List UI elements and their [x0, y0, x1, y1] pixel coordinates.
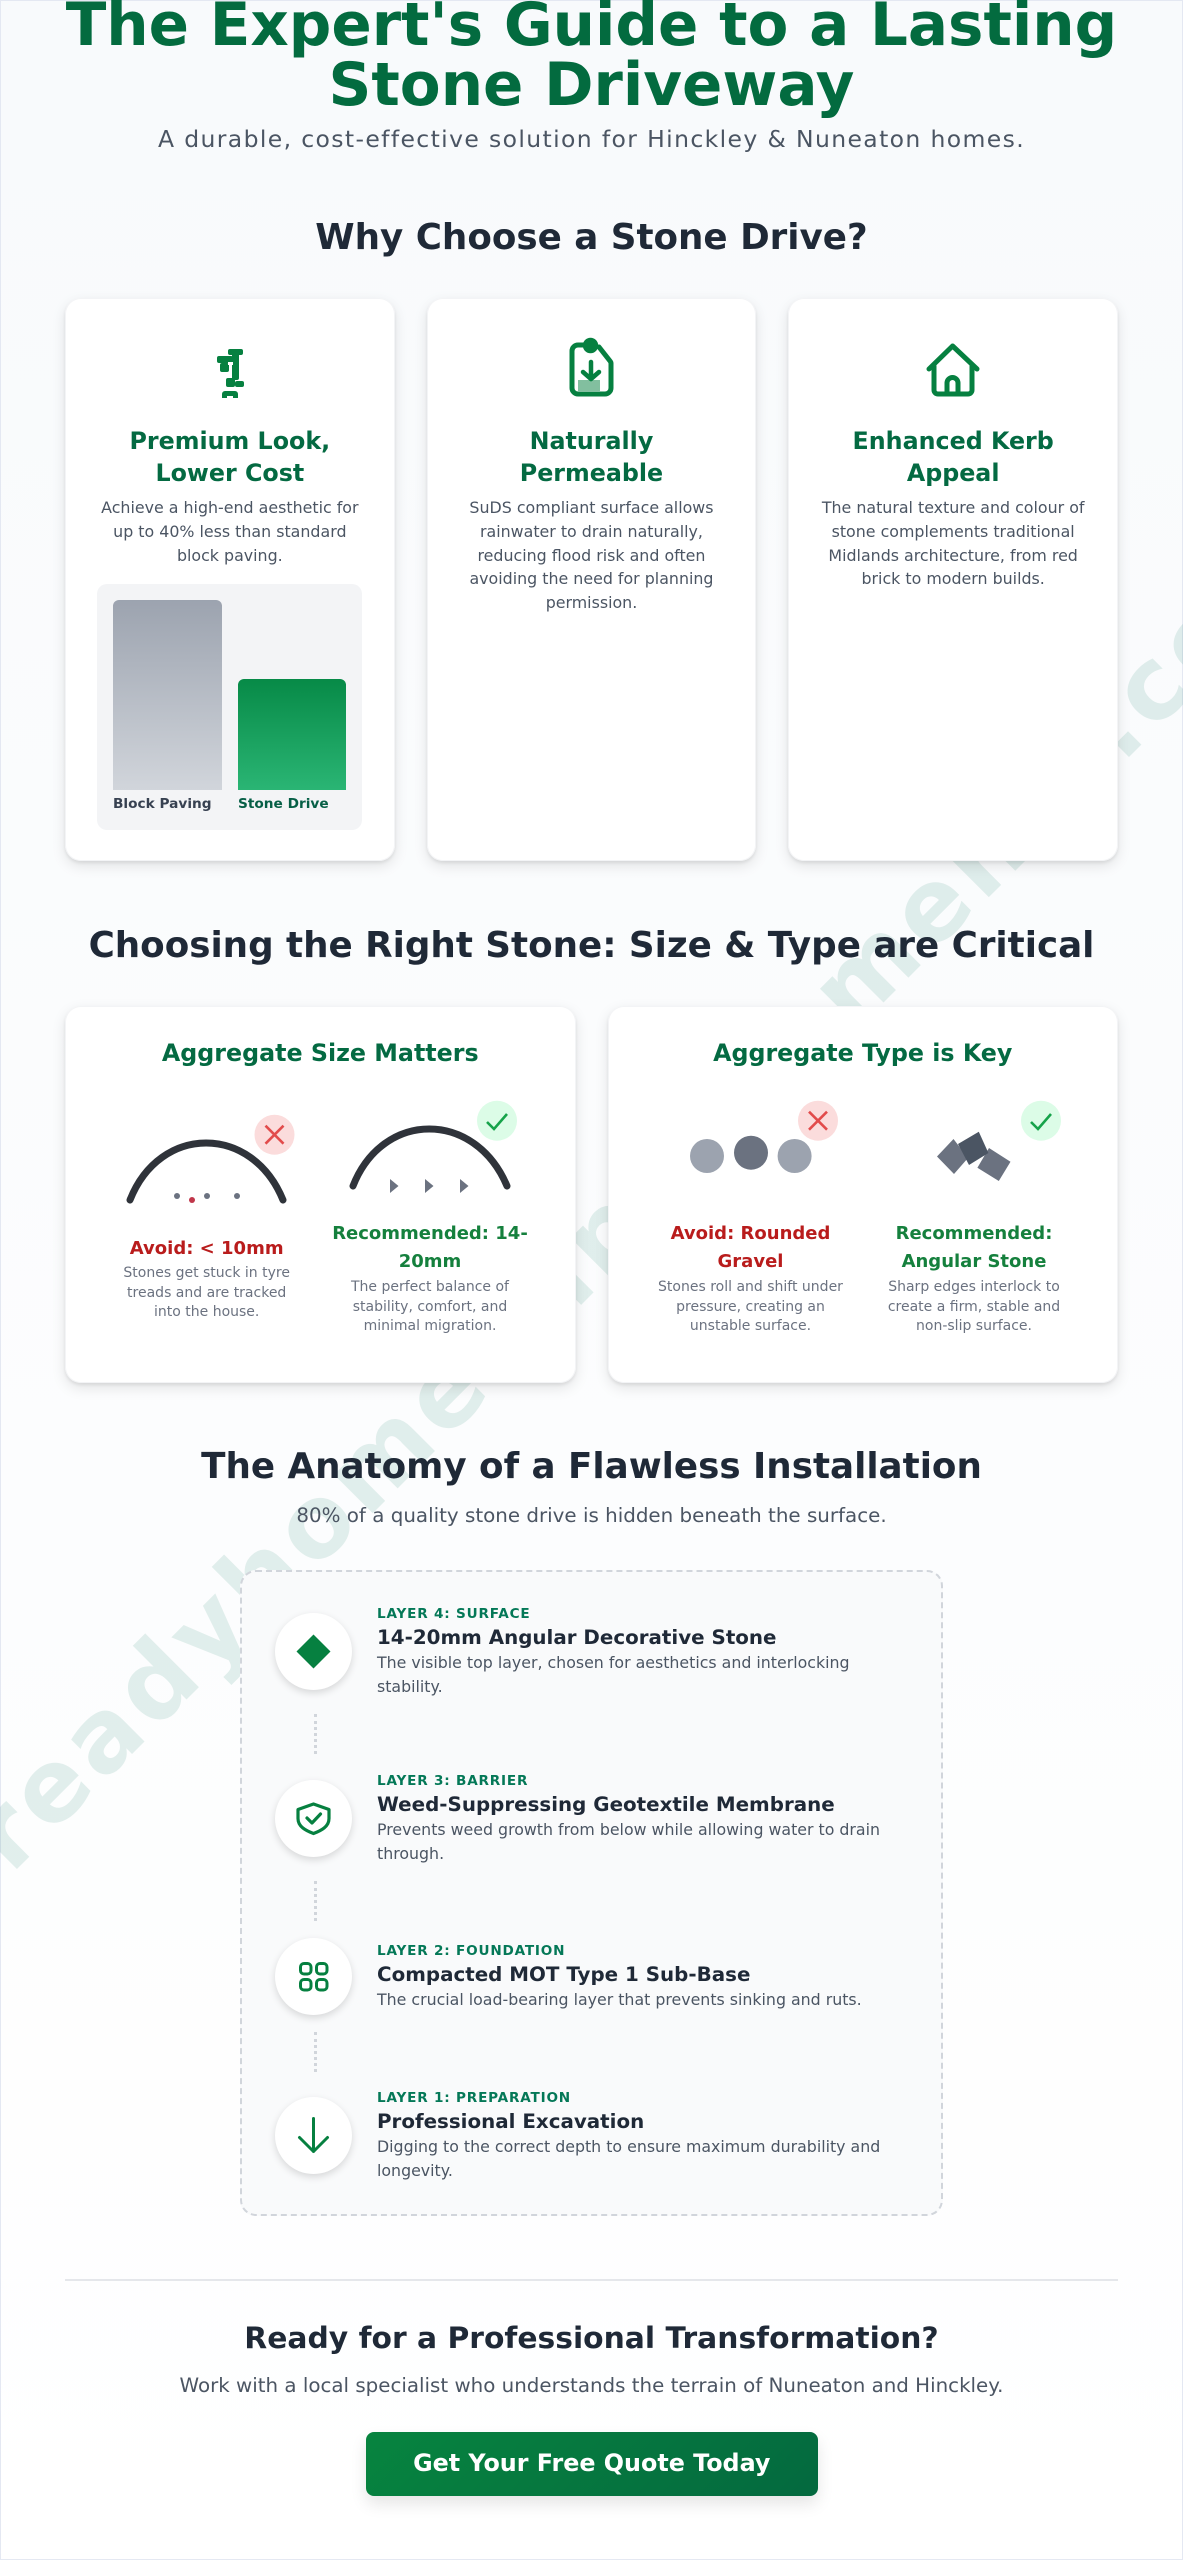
card description: avoiding the need for planning: [469, 569, 713, 588]
layer description: through.: [377, 1844, 444, 1863]
icon: shield: [274, 1780, 352, 1856]
panel: aggregate type: [608, 1006, 1118, 1383]
card description: stone complements traditional: [832, 522, 1075, 541]
recommended description: The perfect balance of: [351, 1279, 509, 1295]
avoid label: Avoid: < 10mm: [130, 1238, 284, 1259]
layer description: longevity.: [377, 2161, 453, 2180]
subtitle: A durable, cost-effective solution for Hinckley & Nuneaton homes.: [158, 125, 1025, 153]
call to action text: Work with a local specialist who understands the terrain of Nuneaton and Hinckley.: [180, 2374, 1003, 2397]
card description: Achieve a high-end aesthetic for: [101, 498, 359, 517]
panel: aggregate size: [65, 1006, 576, 1383]
avoid description: into the house.: [154, 1304, 259, 1320]
bar: stone drive: [238, 679, 346, 790]
icon: permeable tag: [570, 338, 614, 396]
heading: anatomy: The Anatomy of a Flawless Installation: [201, 1446, 982, 1487]
recommended label: Recommended:: [896, 1223, 1052, 1244]
avoid description: [658, 1279, 843, 1334]
card description: reducing flood risk and often: [478, 546, 705, 565]
icon: check badge: [477, 1100, 517, 1141]
icon: cross badge: [798, 1100, 838, 1141]
layer label: LAYER 4: SURFACE: [377, 1606, 530, 1622]
avoid description: pressure, creating an: [676, 1299, 825, 1315]
layer label: LAYER 3: BARRIER: [377, 1773, 528, 1789]
layer title: Weed-Suppressing Geotextile Membrane: [377, 1793, 835, 1816]
avoid label: Avoid: Rounded: [671, 1223, 830, 1244]
recommended description: minimal migration.: [364, 1318, 496, 1334]
avoid label: Gravel: [718, 1250, 783, 1272]
avoid description: [123, 1265, 290, 1320]
card title: [520, 427, 663, 487]
icon: grid: [274, 1938, 352, 2014]
card title: Premium Look,: [130, 427, 330, 455]
button: get a quote: [366, 2432, 818, 2496]
panel: premium look: [65, 298, 395, 861]
recommended label: [332, 1223, 528, 1272]
card description: rainwater to drain naturally,: [480, 522, 703, 541]
recommended description: stability, comfort, and: [353, 1299, 507, 1315]
layer title: Compacted MOT Type 1 Sub-Base: [377, 1963, 750, 1986]
title: [66, 0, 1117, 120]
panel heading: Aggregate Size Matters: [162, 1039, 479, 1067]
avoid description: Stones roll and shift under: [658, 1279, 843, 1295]
heading: choosing the right stone: Choosing the Right Stone: Size & Type are Critical: [89, 925, 1094, 966]
illustration: rounded gravel: [690, 1136, 812, 1173]
illustration: angular stones: [937, 1132, 1010, 1181]
layer description: [377, 2137, 880, 2180]
layer title: 14-20mm Angular Decorative Stone: [377, 1626, 777, 1649]
recommended label: Recommended: 14-: [332, 1223, 528, 1244]
bar: block paving: [113, 600, 222, 790]
card title: Naturally: [530, 427, 653, 455]
layer description: The visible top layer, chosen for aesthetics and interlocking: [377, 1653, 850, 1672]
layer label: LAYER 1: PREPARATION: [377, 2090, 571, 2106]
anatomy subheading: 80% of a quality stone drive is hidden beneath the surface.: [296, 1504, 887, 1527]
card description: The natural texture and colour of: [822, 498, 1084, 517]
layer description: [377, 1820, 880, 1863]
panel heading: Aggregate Type is Key: [713, 1039, 1012, 1067]
icon: check badge: [1021, 1100, 1061, 1141]
layer 4: surface: [272, 1606, 850, 1696]
panel: kerb appeal: [788, 298, 1118, 861]
illustration: recommended stones under tread: [350, 1126, 510, 1193]
avoid description: unstable surface.: [690, 1318, 811, 1334]
icon: diamond: [274, 1612, 352, 1690]
call to action heading: Ready for a Professional Transformation?: [244, 2321, 939, 2356]
recommended label: [896, 1223, 1052, 1272]
panel: naturally permeable: [427, 298, 756, 861]
layer label: LAYER 2: FOUNDATION: [377, 1943, 565, 1959]
layer title: Professional Excavation: [377, 2110, 644, 2133]
card title: [130, 427, 330, 487]
recommended label: 20mm: [399, 1250, 461, 1272]
recommended description: Sharp edges interlock to: [888, 1279, 1060, 1295]
heading: why choose: Why Choose a Stone Drive?: [315, 217, 868, 258]
illustration: small stones under tread: [126, 1140, 286, 1204]
title: Stone Driveway: [329, 51, 854, 120]
layer description: stability.: [377, 1677, 443, 1696]
icon: cross badge: [254, 1114, 294, 1155]
card title: Permeable: [520, 459, 663, 487]
card description: [469, 498, 714, 612]
card description: SuDS compliant surface allows: [469, 498, 714, 517]
card description: [101, 498, 359, 565]
layer description: The crucial load-bearing layer that prevents sinking and ruts.: [377, 1990, 862, 2009]
layer description: [376, 1653, 850, 1696]
icon: down arrow: [274, 2096, 352, 2174]
recommended description: non-slip surface.: [916, 1318, 1032, 1334]
icon: house: [926, 344, 980, 396]
layer description: Prevents weed growth from below while allowing water to drain: [377, 1820, 880, 1839]
card title: Lower Cost: [155, 459, 304, 487]
card description: up to 40% less than standard: [113, 522, 346, 541]
bar label: block paving: Block Paving: [113, 796, 212, 812]
card description: permission.: [546, 593, 637, 612]
recommended description: [888, 1279, 1060, 1334]
avoid label: [670, 1223, 830, 1272]
layer 1: preparation: [272, 2090, 880, 2180]
layer 2: foundation: [272, 1943, 862, 2020]
panel: installation layers: [240, 1570, 943, 2216]
bar label: stone drive: Stone Drive: [238, 796, 329, 812]
avoid description: Stones get stuck in tyre: [123, 1265, 290, 1281]
layer 3: barrier: [272, 1773, 880, 1863]
card title: Appeal: [907, 459, 999, 487]
recommended description: [350, 1279, 510, 1334]
card description: [822, 498, 1085, 588]
recommended label: Angular Stone: [902, 1250, 1046, 1272]
icon: garbled stone mark: [217, 349, 244, 398]
button: get a quote: Get Your Free Quote Today: [413, 2449, 770, 2477]
layer description: Digging to the correct depth to ensure maximum durability and: [377, 2137, 880, 2156]
card description: Midlands architecture, from red: [828, 546, 1078, 565]
card title: Enhanced Kerb: [853, 427, 1054, 455]
bar chart: cost comparison: [97, 584, 362, 830]
avoid description: treads and are tracked: [127, 1285, 286, 1301]
card description: brick to modern builds.: [861, 569, 1045, 588]
recommended description: create a firm, stable and: [888, 1299, 1060, 1315]
card description: block paving.: [177, 546, 283, 565]
card title: [853, 427, 1054, 487]
